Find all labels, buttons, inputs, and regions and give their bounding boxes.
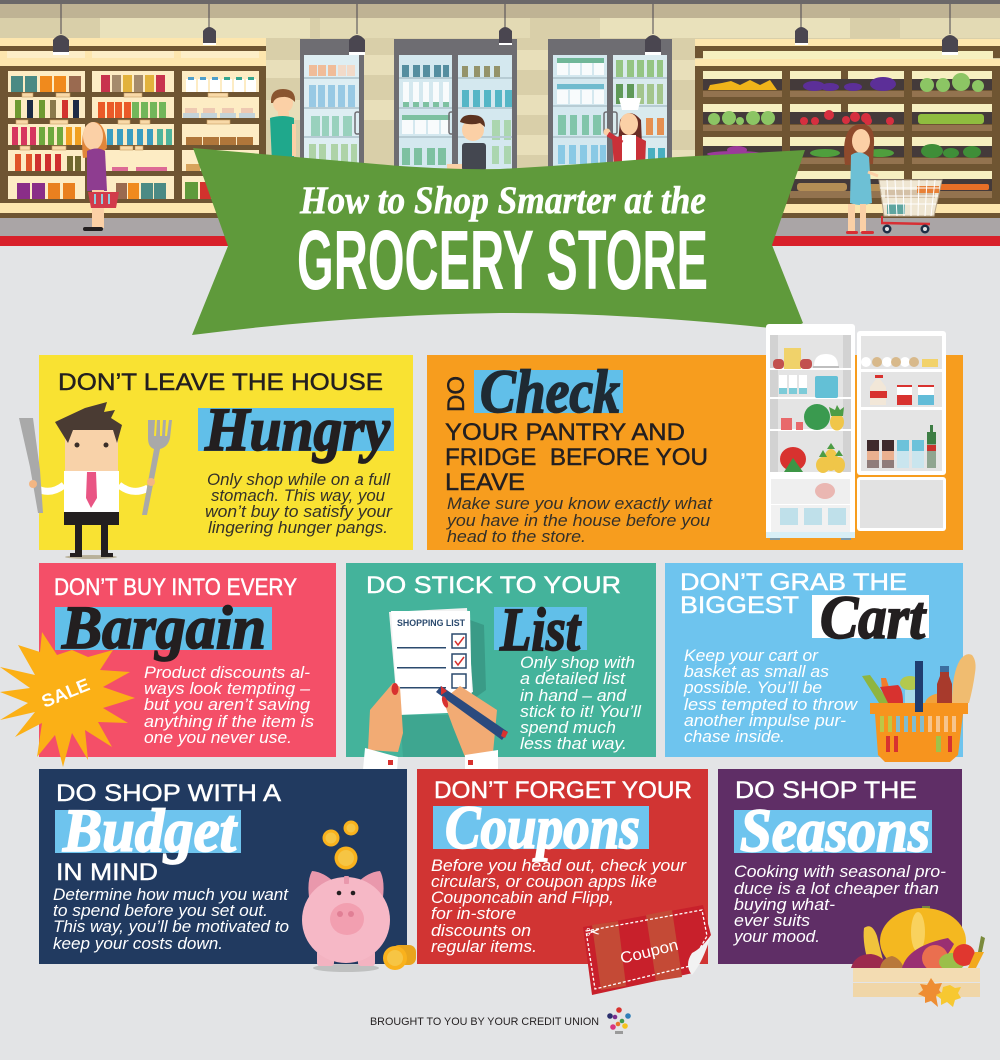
freezer drinks [309,58,665,165]
body text: ways look tempting – [144,679,311,698]
body text: Before you head out, check your [431,856,687,875]
fridge contents [773,348,938,525]
heading [680,569,907,619]
heading: DO SHOP WITH A [56,780,281,807]
icon: sale starburst [0,632,135,767]
icon: harvest crate [851,906,985,1007]
heading: DO SHOP THE [735,777,917,804]
body text: your mood. [733,927,820,946]
title line 1: How to Shop Smarter at the [299,179,706,222]
icon: shopping list and hands: SHOPPING LIST [397,618,465,628]
body text: basket as small as [684,662,830,681]
shopper in teal shirt [270,89,296,163]
body text [205,470,393,537]
body text: circulars, or coupon apps like [431,872,657,891]
rotated DO label: DO [443,376,470,412]
left grocery shelf [0,38,266,218]
body text: regular items. [431,937,537,956]
icon: basket of groceries [862,654,976,762]
highlight: Hungry: Hungry [204,397,391,464]
body text: duce is a lot cheaper than [734,879,939,898]
body text: one you never use. [144,728,292,747]
body text: less that way. [520,734,627,753]
icon: shopping list and hands [363,608,508,770]
highlight: Bargain: Bargain [61,595,266,662]
highlight: Check: Check [480,359,620,426]
body text [520,653,642,753]
produce items [707,73,989,191]
heading: DON’T GRAB THE [680,569,907,596]
icon: hungry man with knife and fork [19,402,172,559]
icon: sale starburst: SALE [39,674,93,712]
body text [144,663,315,747]
panel: seasons [718,769,985,1007]
panel: check pantry [427,324,963,550]
body text: ever suits [734,911,811,930]
title banner [192,148,805,335]
body text: stomach. This way, you [211,486,386,505]
body text: Couponcabin and Flipp, [431,888,614,907]
store wall [0,0,1000,236]
body text: stick to it! You’ll [520,702,642,721]
panel: coupons [417,769,711,995]
right produce shelf [695,39,1000,218]
body text: lingering hunger pangs. [208,518,388,537]
floor and red stripe [0,218,1000,246]
highlight: List: List [499,597,582,664]
panel: budget [39,769,416,972]
body text: buying what- [734,895,835,914]
icon: coupon ticket: Coupon [619,937,680,968]
heading [445,419,708,496]
heading: DON’T FORGET YOUR [434,777,692,804]
body text: another impulse pur- [684,711,846,730]
body text: Only shop while on a full [207,470,391,489]
body text [446,494,713,546]
body text [683,646,859,746]
body text: a detailed list [520,669,626,688]
icon: credit union logo [607,1007,631,1034]
heading: BIGGEST [680,592,799,619]
body text: in hand – and [520,686,627,705]
body text: Product discounts al- [144,663,310,682]
icon: open fridge [766,324,946,540]
heading: FRIDGE BEFORE YOU [445,444,708,471]
icon: coupon ticket [583,905,711,995]
body text [431,856,687,956]
heading: YOUR PANTRY AND [445,419,685,446]
body text: you have in the house before you [446,511,711,530]
shelf products [11,75,256,199]
body text: Keep your cart or [684,646,819,665]
highlight: Seasons: Seasons [740,798,930,865]
body text: but you aren’t saving [144,695,311,714]
highlight: Cart: Cart [820,585,927,652]
panel: list [346,563,656,770]
heading continued: IN MIND [56,859,158,886]
body text: possible. You’ll be [683,678,822,697]
body text: discounts on [431,921,531,940]
body text [733,862,946,946]
woman with chef hat [604,98,646,167]
heading: DON’T BUY INTO EVERY [54,574,297,601]
heading: DO STICK TO YOUR [366,572,621,599]
panel: hungry [19,355,413,559]
body text: for in-store [431,904,516,923]
panel: cart [665,563,976,762]
freezer doors [300,39,672,169]
body text: less tempted to throw [684,695,859,714]
body text: Cooking with seasonal pro- [734,862,946,881]
ceiling lamps [53,4,958,55]
body text: chase inside. [684,727,785,746]
store scene illustration [0,0,1000,246]
icon: piggy bank and coins [302,820,416,972]
body text [53,885,289,953]
shopping cart [879,180,942,234]
body text: This way, you’ll be motivated to [53,917,289,936]
heading: DON’T LEAVE THE HOUSE [58,369,383,396]
body text: Determine how much you want [53,885,289,904]
footer credit: BROUGHT TO YOU BY YOUR CREDIT UNION [370,1016,599,1028]
body text: keep your costs down. [53,934,223,953]
icon: coupon ticket: ✂ [586,923,600,943]
body text: Make sure you know exactly what [447,494,713,513]
highlight: Coupons: Coupons [445,795,640,862]
body text: spend much [520,718,616,737]
woman with basket [82,122,119,231]
panel: bargain [0,563,336,767]
shopping basket [88,192,119,208]
clerk at freezer [447,115,486,171]
body text: anything if the item is [144,712,315,731]
freezer shelves and handles [304,77,667,138]
body text: to spend before you set out. [53,901,268,920]
woman with cart [844,124,942,234]
heading: LEAVE [445,469,525,496]
body text: head to the store. [447,527,586,546]
body text: won’t buy to satisfy your [205,502,393,521]
body text: Only shop with [520,653,635,672]
highlight: Budget: Budget [62,798,238,865]
